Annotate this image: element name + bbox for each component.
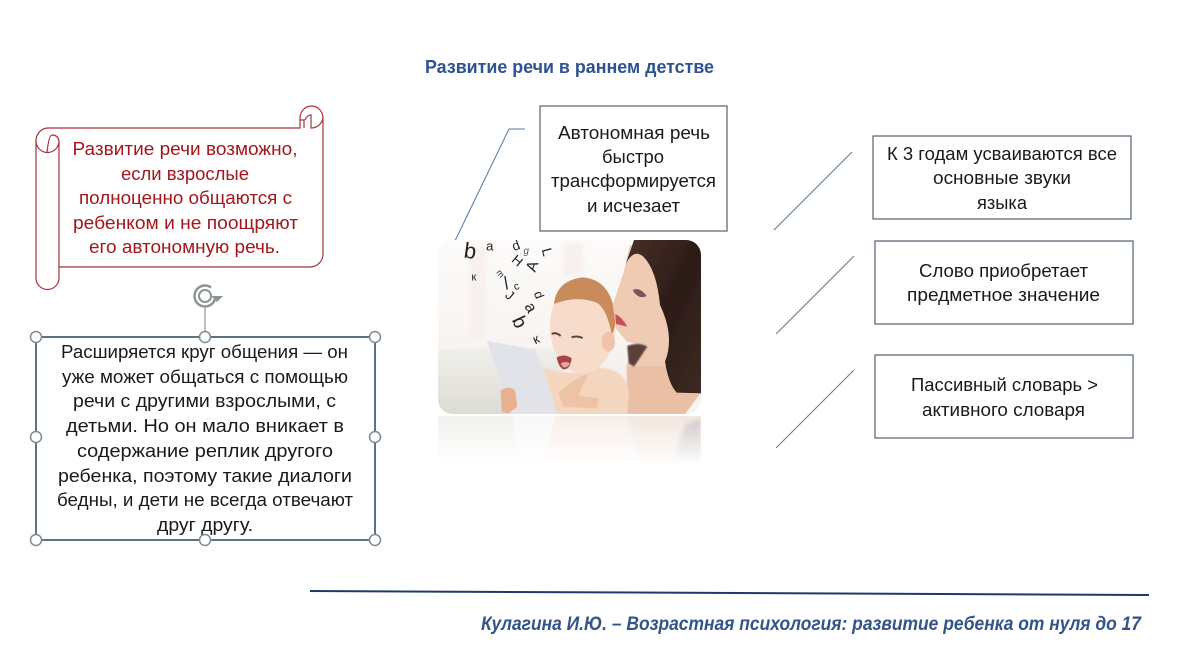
panel: word meaning box: [875, 241, 1133, 324]
flying letters: J: [502, 287, 517, 303]
mother face details: [633, 289, 647, 297]
panel: autonomous speech box: быстро: [602, 147, 664, 167]
flying letters: к: [530, 331, 542, 347]
selection handles: [30, 332, 380, 546]
selected box text: содержание реплик другого: [77, 441, 333, 461]
panel: autonomous speech box: и исчезает: [587, 196, 680, 216]
panel: autonomous speech box: трансформируется: [551, 171, 716, 191]
scroll text: если взрослые: [121, 164, 249, 184]
flying letters: b: [507, 313, 531, 332]
connector: right box 2: [776, 256, 854, 334]
photo reflection: [438, 416, 701, 458]
panel: scroll callout: [36, 106, 323, 290]
scroll shape: [36, 106, 323, 290]
baby head: [550, 299, 616, 374]
baby hand: [501, 388, 517, 413]
selected box text: бедны, и дети не всегда отвечают: [57, 490, 353, 510]
panel: sounds box: [873, 136, 1131, 219]
panel: autonomous speech box: [540, 106, 727, 231]
flying letters: d: [510, 237, 522, 254]
flying letters: m: [495, 268, 507, 279]
flying letters: d: [531, 289, 546, 301]
flying letters: L: [539, 246, 556, 258]
connector: right box 3: [776, 370, 854, 448]
panel: vocabulary box: [875, 355, 1133, 438]
flying letters: к: [471, 272, 477, 284]
selected box text: друг другу.: [157, 515, 253, 535]
mother hair: [626, 240, 702, 393]
panel: vocabulary box: активного словаря: [922, 400, 1085, 420]
panel: word meaning box: предметное значение: [907, 285, 1100, 305]
icon: rotate handle: [192, 283, 223, 331]
scroll text: [72, 139, 298, 257]
selected box text: ребенка, поэтому такие диалоги: [58, 466, 352, 486]
flying letters: [462, 237, 556, 347]
selected box text: речи с другими взрослыми, с: [73, 391, 336, 411]
flying letters: H: [509, 252, 526, 270]
panel: autonomous speech box: Автономная речь: [558, 123, 710, 143]
connector: right box 1: [774, 152, 852, 230]
panel: word meaning box: Слово приобретает: [919, 261, 1088, 281]
flying letters: g: [523, 246, 529, 257]
photo: mother and baby with letters: [437, 237, 702, 417]
paper sheet: [487, 341, 557, 414]
scroll text: ребенком и не поощряют: [73, 213, 298, 233]
baby body: [543, 367, 629, 417]
footer rule: [310, 591, 1149, 595]
panel: selected text box: [30, 332, 380, 546]
panel: sounds box: языка: [977, 193, 1028, 213]
connector: photo to autonomous speech box: [453, 129, 525, 245]
flying letters: c: [512, 280, 522, 293]
scroll text: Развитие речи возможно,: [72, 139, 298, 159]
scroll text: полноценно общаются с: [79, 188, 292, 208]
panel: vocabulary box: Пассивный словарь >: [911, 375, 1098, 395]
title: Развитие речи в раннем детстве: [425, 57, 714, 77]
footer citation: Кулагина И.Ю. – Возрастная психология: развитие ребенка от нуля до 17: [481, 614, 1142, 635]
flying letters: A: [523, 258, 543, 274]
panel: sounds box: К 3 годам усваиваются все: [887, 144, 1117, 164]
mother chest: [627, 363, 701, 417]
selected box text: [57, 342, 353, 535]
flying letters: b: [462, 238, 478, 264]
scroll text: его автономную речь.: [89, 237, 280, 257]
panel: sounds box: основные звуки: [933, 168, 1071, 188]
selected box text: Расширяется круг общения — он: [61, 342, 348, 362]
selected box text: уже может общаться с помощью: [62, 367, 348, 387]
flying letters: /: [500, 273, 513, 293]
background sofa: [437, 347, 563, 417]
flying letters: a: [521, 300, 540, 316]
selected box text: детьми. Но он мало вникает в: [66, 416, 344, 436]
mother face: [613, 245, 672, 367]
flying letters: a: [486, 239, 494, 254]
